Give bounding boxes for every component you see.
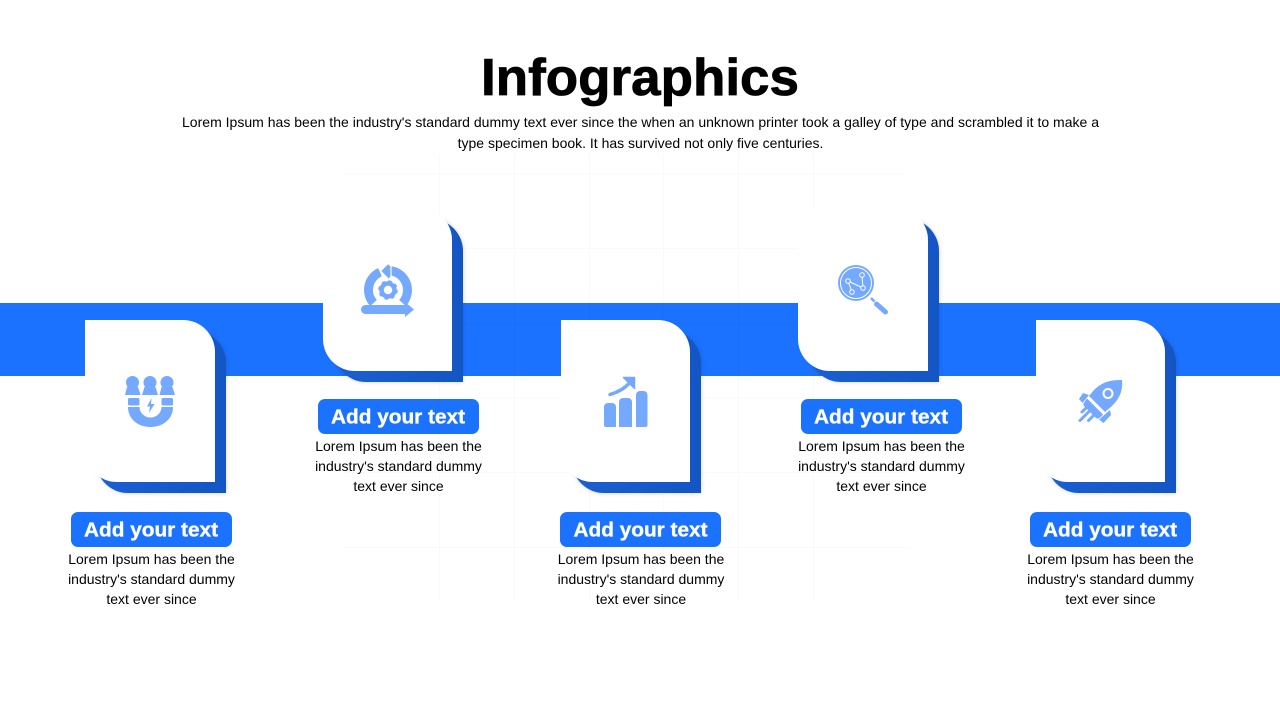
label block 4 (798, 399, 965, 494)
label block 1: industry's standard dummy (68, 571, 235, 587)
button 5 (1030, 512, 1191, 547)
card 5: rocket (1036, 320, 1176, 493)
label block 2: industry's standard dummy (315, 458, 482, 474)
label block 4: text ever since (836, 478, 927, 494)
label block 2 (315, 399, 482, 494)
blue horizontal band (0, 303, 1280, 376)
button 4: Add your text (814, 406, 948, 428)
label block 2: Lorem Ipsum has been the (315, 438, 482, 454)
subtitle text: Lorem Ipsum has been the industry's standard dummy text ever since the when an unknown printer took a galley of type and scrambled it to make a (182, 114, 1099, 130)
button 5: Add your text (1043, 520, 1177, 542)
icon: people and magnet (125, 376, 175, 427)
label block 1: text ever since (106, 591, 197, 607)
subtitle text: type specimen book. It has survived not only five centuries. (458, 135, 823, 151)
icon: gear cycle with arrow (361, 264, 414, 317)
label block 3: Lorem Ipsum has been the (558, 551, 724, 567)
button 1: Add your text (84, 520, 218, 542)
button 1 (71, 512, 232, 547)
label block 2: text ever since (353, 478, 444, 494)
subtitle text (182, 114, 1099, 151)
label block 5: text ever since (1065, 591, 1156, 607)
title: Infographics (481, 49, 799, 107)
button 3 (560, 512, 721, 547)
icon: rocket (1079, 380, 1122, 423)
label block 5 (1027, 512, 1194, 607)
label block 4: industry's standard dummy (798, 458, 965, 474)
icon: magnifier with network (838, 265, 886, 312)
label block 5: industry's standard dummy (1027, 571, 1194, 587)
label block 3: industry's standard dummy (558, 571, 724, 587)
card 3: growth chart (561, 320, 701, 493)
label block 3: text ever since (596, 591, 686, 607)
icon: rising bars and arrow (604, 378, 648, 427)
label block 1: Lorem Ipsum has been the (68, 551, 235, 567)
label block 1 (68, 512, 235, 607)
button 4 (801, 399, 962, 434)
button 2: Add your text (331, 406, 465, 428)
label block 3 (558, 512, 724, 607)
button 3: Add your text (574, 520, 708, 542)
button 2 (318, 399, 479, 434)
label block 5: Lorem Ipsum has been the (1027, 551, 1194, 567)
card 2: process cycle (323, 208, 463, 382)
card 4: data search (798, 208, 939, 382)
label block 4: Lorem Ipsum has been the (798, 438, 965, 454)
card 1: magnet and people (85, 320, 226, 493)
